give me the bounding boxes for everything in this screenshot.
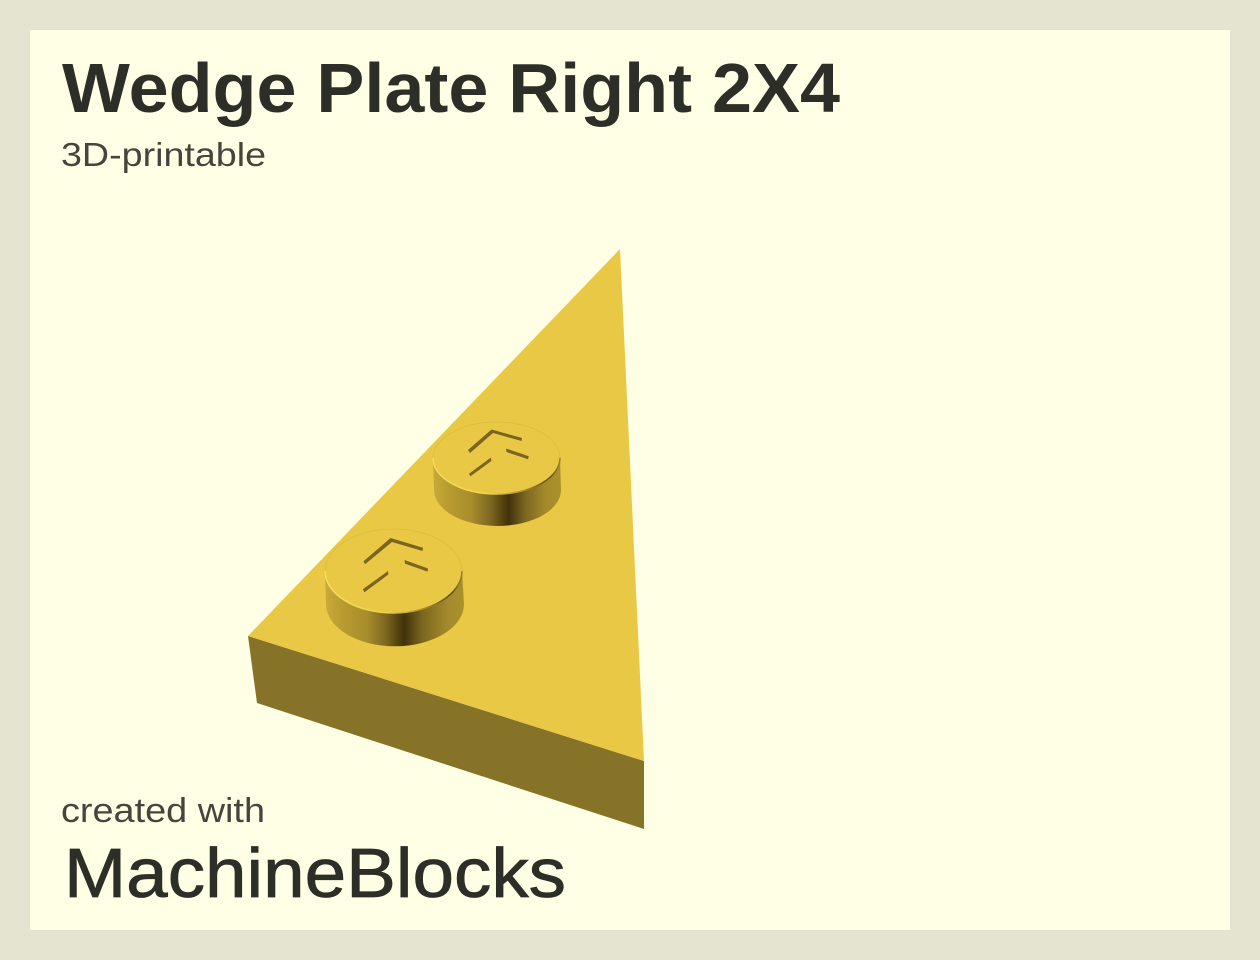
brand name: MachineBlocks (64, 834, 566, 912)
upper stud top face (433, 422, 560, 494)
upper stud side wall (433, 458, 561, 526)
stud: lower (325, 529, 464, 646)
subtitle: 3D-printable (61, 136, 266, 173)
3D model: wedge plate (248, 249, 644, 829)
wedge front side face (248, 636, 644, 829)
lower stud top rim (325, 571, 462, 613)
credit line: created with (61, 792, 265, 830)
title: Wedge Plate Right 2X4 (62, 49, 840, 127)
lower stud embossed logo (363, 538, 428, 592)
lower stud side wall (325, 571, 464, 646)
lower stud top face (325, 529, 462, 613)
stud: upper (433, 422, 561, 526)
upper stud embossed logo (468, 430, 529, 476)
wedge top face (248, 249, 644, 761)
upper stud top rim (433, 458, 560, 494)
